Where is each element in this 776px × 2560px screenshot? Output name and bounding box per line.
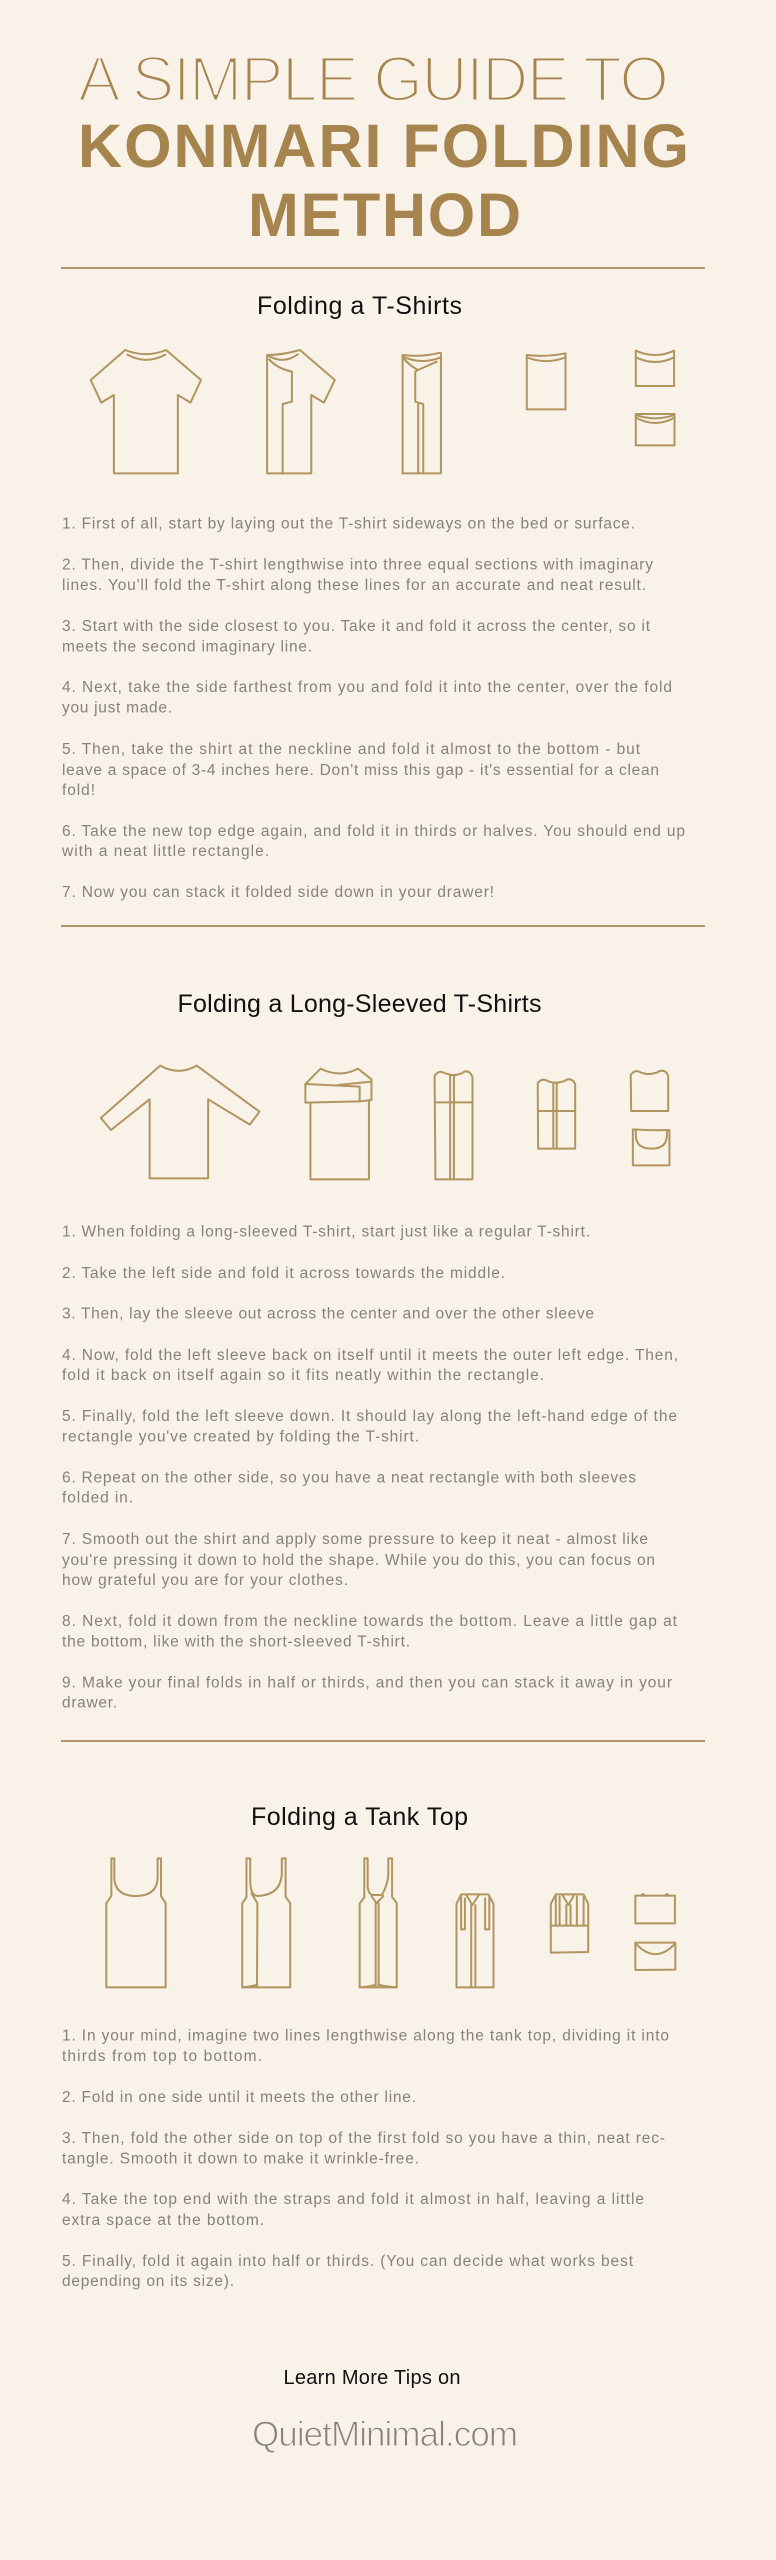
icon: both sides folded [360, 1858, 397, 1987]
step 3: 3. Then, lay the sleeve out across the center and over the other sleeve [62, 1306, 594, 1322]
step 3: 3. Start with the side closest to you. Take it and fold it across the center, so it [62, 618, 651, 635]
step 4 [62, 2191, 644, 2229]
step 1: 1. When folding a long-sleeved T-shirt, start just like a regular T-shirt. [62, 1224, 590, 1240]
step 1 [62, 2028, 669, 2065]
step 3 [62, 618, 651, 656]
step 6: with a neat little rectangle. [61, 843, 269, 860]
icon: final fold front [635, 1894, 675, 1923]
step 4 [62, 679, 672, 716]
illustration: long-sleeved folding sequence [101, 1066, 669, 1179]
icon: t-shirt with both sides folded [403, 353, 441, 473]
step 6: folded in. [62, 1490, 133, 1506]
text block: long-sleeved steps [62, 1224, 678, 1712]
icon: shirt folded toward bottom [527, 353, 566, 409]
step 5: depending on its size). [62, 2273, 234, 2290]
step 4: extra space at the bottom. [62, 2212, 264, 2229]
step 5: fold! [62, 782, 95, 799]
step 5: 5. Finally, fold it again into half or thirds. (You can decide what works best [62, 2253, 634, 2270]
step 2: 2. Take the left side and fold it across towards the middle. [62, 1265, 505, 1282]
step 2: lines. You'll fold the T-shirt along these lines for an accurate and neat result. [62, 577, 646, 594]
step 1: thirds from top to bottom. [62, 2048, 262, 2065]
text block: tank top steps [62, 2028, 669, 2290]
step 3 [62, 2130, 665, 2168]
step 6: 6. Repeat on the other side, so you have a neat rectangle with both sleeves [62, 1470, 636, 1486]
icon: first side folded [242, 1858, 290, 1987]
step 3: tangle. Smooth it down to make it wrinkle-free. [62, 2150, 419, 2168]
step 2: 2. Fold in one side until it meets the other line. [62, 2089, 416, 2106]
icon: t-shirt with first side folded [267, 350, 335, 473]
icon: final fold back [633, 1129, 669, 1165]
icon: flat long-sleeved shirt [101, 1066, 260, 1178]
call to action: learn more tips on: Learn More Tips on [284, 2367, 460, 2389]
icon: final fold back [635, 1943, 675, 1970]
icon: final fold front [631, 1071, 668, 1111]
step 5: 5. Then, take the shirt at the neckline and fold it almost to the bottom - but [62, 741, 641, 758]
step 9 [62, 1674, 672, 1712]
step 3: 3. Then, fold the other side on top of the first fold so you have a thin, neat rec- [62, 2130, 665, 2147]
step 1: 1. First of all, start by laying out the T-shirt sideways on the bed or surface. [62, 516, 635, 532]
icon: folded in half [551, 1894, 588, 1953]
step 5 [62, 1408, 677, 1446]
step 8: 8. Next, fold it down from the neckline towards the bottom. Leave a little gap at [62, 1613, 678, 1630]
illustration: tank top folding sequence [106, 1858, 675, 1987]
icon: final fold front [636, 351, 674, 386]
illustration: t-shirt folding sequence [91, 350, 675, 473]
step 4: fold it back on itself again so it fits neatly within the rectangle. [62, 1367, 544, 1384]
step 9: drawer. [62, 1694, 117, 1712]
panel: folding a tank top [62, 1803, 675, 2290]
step 6: 6. Take the new top edge again, and fold it in thirds or halves. You should end up [62, 823, 685, 840]
step 4: 4. Now, fold the left sleeve back on itself until it meets the outer left edge. Then, [62, 1347, 678, 1364]
icon: straps folded down [456, 1894, 494, 1987]
step 7: you're pressing it down to hold the shape. While you do this, you can focus on [62, 1552, 655, 1569]
panel: folding a t-shirt [61, 292, 685, 901]
step 1: 1. In your mind, imagine two lines lengthwise along the tank top, dividing it into [62, 2028, 669, 2044]
icon: final fold back [636, 414, 675, 445]
step 5 [62, 2253, 634, 2290]
step 7 [62, 1531, 655, 1589]
step 8 [62, 1613, 678, 1650]
step 5: leave a space of 3-4 inches here. Don't miss this gap - it's essential for a clean [62, 762, 659, 779]
step 4: 4. Take the top end with the straps and fold it almost in half, leaving a little [62, 2191, 644, 2208]
step 6 [61, 823, 685, 860]
step 3: meets the second imaginary line. [62, 638, 312, 656]
step 7: 7. Smooth out the shirt and apply some pressure to keep it neat - almost like [62, 1531, 648, 1548]
website: quietminimal.com: QuietMinimal.com [252, 2415, 518, 2454]
step 5 [62, 741, 659, 799]
step 5: rectangle you've created by folding the T-shirt. [62, 1428, 419, 1446]
panel: folding a long-sleeved t-shirt [62, 990, 678, 1712]
heading: folding a long-sleeved t-shirts: Folding a Long-Sleeved T-Shirts [178, 990, 542, 1018]
step 5: 5. Finally, fold the left sleeve down. It should lay along the left-hand edge of the [62, 1408, 677, 1425]
heading: folding a t-shirts: Folding a T-Shirts [257, 292, 462, 320]
title line: method: METHOD [248, 181, 521, 249]
step 6 [62, 1470, 636, 1506]
step 9: 9. Make your final folds in half or thirds, and then you can stack it away in your [62, 1674, 672, 1692]
footer [252, 2367, 518, 2454]
step 4: you just made. [62, 700, 172, 716]
title line: a simple guide to: A SIMPLE GUIDE TO [78, 43, 669, 115]
heading: folding a tank top: Folding a Tank Top [251, 1803, 468, 1831]
step 7: how grateful you are for your clothes. [62, 1572, 348, 1589]
icon: both sides folded in [435, 1071, 472, 1179]
icon: flat tank top [106, 1858, 166, 1987]
icon: flat t-shirt [91, 350, 201, 473]
step 7: 7. Now you can stack it folded side down in your drawer! [62, 884, 494, 901]
text block: t-shirt steps [61, 516, 685, 901]
step 4: 4. Next, take the side farthest from you and fold it into the center, over the fold [62, 679, 672, 696]
step 8: the bottom, like with the short-sleeved T-shirt. [62, 1634, 410, 1650]
title [78, 43, 689, 249]
step 2 [62, 556, 653, 594]
icon: sleeve folded across [305, 1069, 371, 1179]
title line: konmari folding: KONMARI FOLDING [78, 112, 689, 180]
step 4 [62, 1347, 678, 1384]
step 2: 2. Then, divide the T-shirt lengthwise into three equal sections with imaginary [62, 556, 653, 574]
icon: shirt folded shorter [538, 1079, 575, 1149]
